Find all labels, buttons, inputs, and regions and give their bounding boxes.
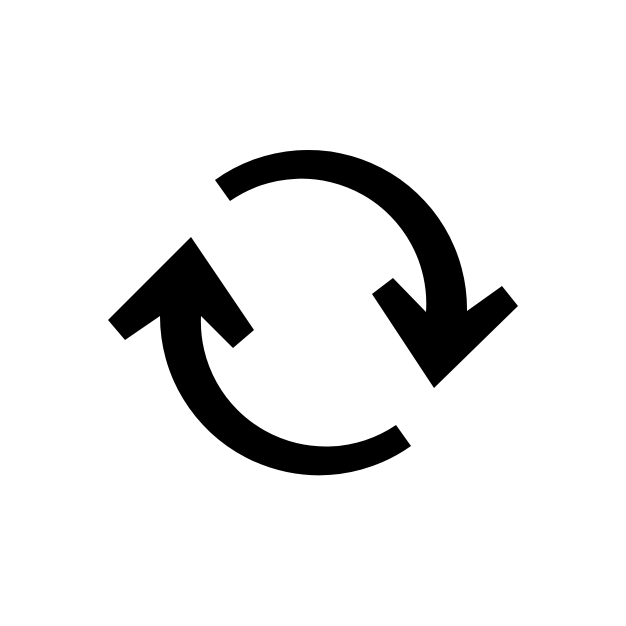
arrow: top right clockwise [215,150,518,388]
arrow: bottom left clockwise [108,237,411,475]
